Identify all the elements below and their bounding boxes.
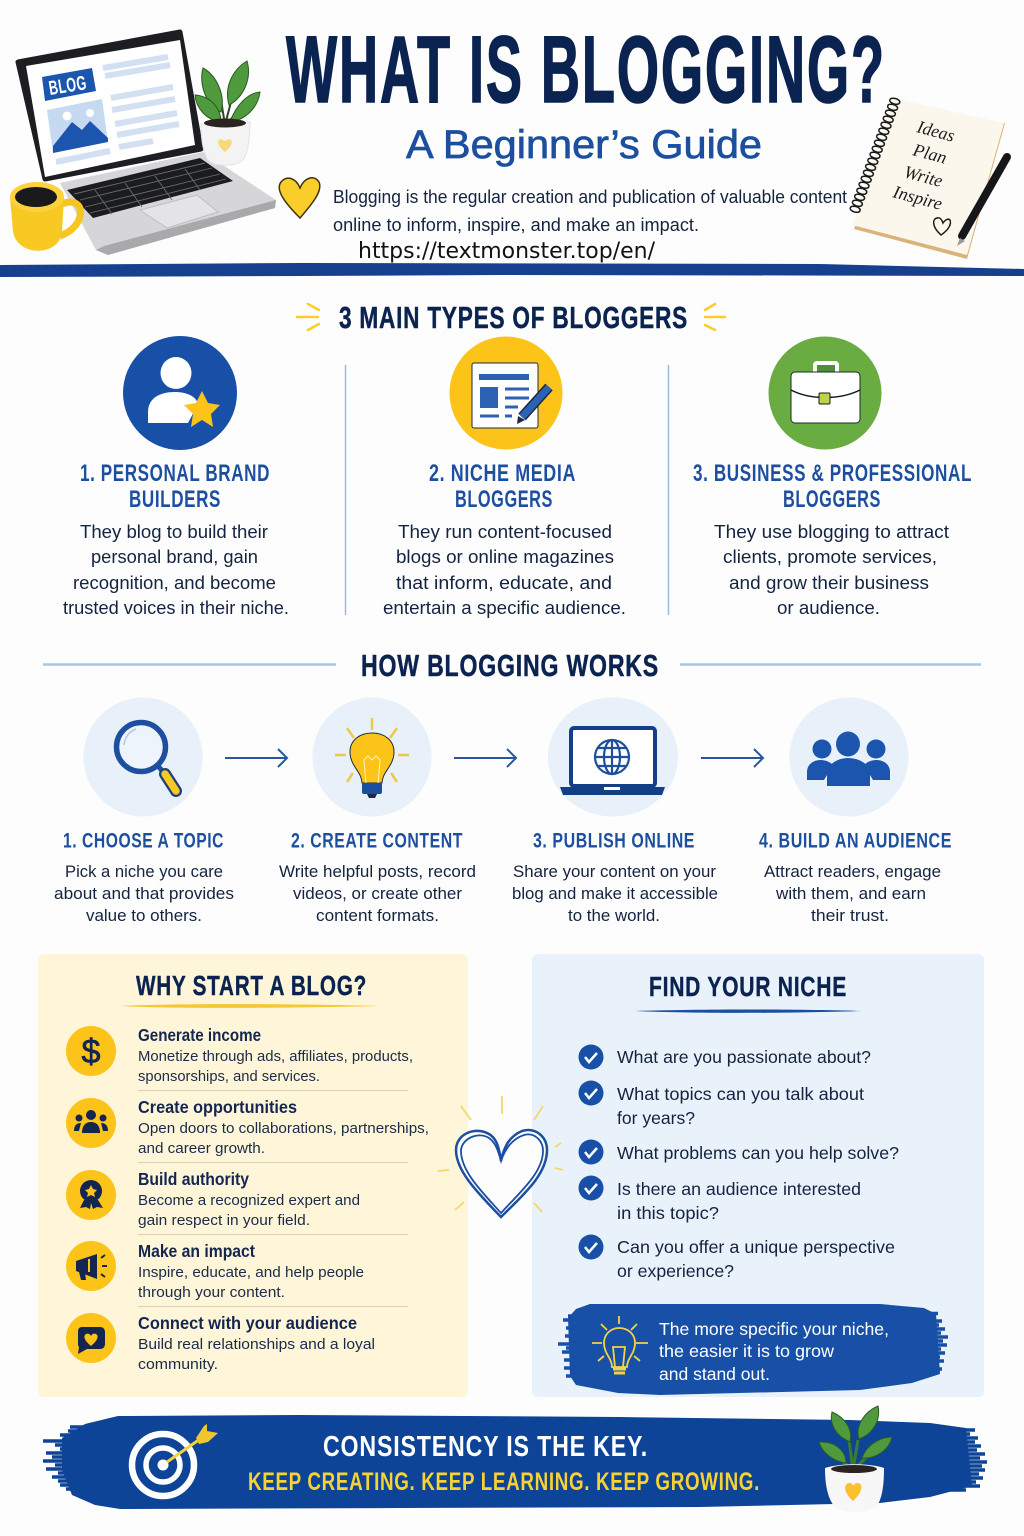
subtitle: A Beginner’s Guide [406,123,762,167]
header brush divider [0,263,1024,277]
item: make an impact: Make an impact [138,1241,255,1261]
step 4 [759,830,952,925]
icon: notebook and pen: Inspire [890,181,944,214]
step 2: 2. CREATE CONTENT [291,830,463,852]
step 2: videos, or create other [293,885,463,903]
column: business and professional bloggers: They use blogging to attract [714,522,949,542]
step 3: blog and make it accessible [512,885,718,903]
step 1: 1. CHOOSE A TOPIC [63,830,224,852]
icon: notebook and pen [850,98,1007,259]
step 1: about and that provides [54,885,234,903]
checklist: What problems can you help solve? [617,1143,899,1163]
step 4: their trust. [811,907,889,925]
item: create opportunities: Create opportunities [138,1097,297,1117]
banner: consistency is the key: CONSISTENCY IS THE KEY. [323,1431,648,1463]
item: connect with your audience: Connect with your audience [138,1313,357,1333]
callout: niche tip: the easier it is to grow [659,1341,834,1361]
arrow [454,749,516,767]
step 4: Attract readers, engage [764,863,941,881]
column: business and professional bloggers: clients, promote services, [723,547,937,567]
icon: tip bulb [592,1316,648,1373]
banner: consistency is the key [43,1406,987,1512]
icon: niche media [450,336,562,450]
item: connect with your audience: community. [138,1357,218,1373]
item: make an impact [66,1241,364,1301]
column: business and professional bloggers: or audience. [777,598,880,618]
icon: notebook and pen: Plan [910,139,949,168]
checklist: in this topic? [617,1203,719,1223]
item: build authority [66,1169,360,1229]
step 3: Share your content on your [513,863,717,881]
item: create opportunities [66,1097,429,1157]
item: create opportunities: Open doors to collaborations, partnerships, [138,1121,429,1137]
icon: laptop with blog page: BLOG [47,72,88,100]
step 2 [279,830,476,925]
intro text [333,187,847,235]
icon: notebook and pen: Write [902,162,945,191]
item: generate income [66,1025,413,1085]
column: business and professional bloggers [693,460,972,618]
column: niche media bloggers: 2. NICHE MEDIA [429,460,576,487]
heading: why start a blog: WHY START A BLOG? [136,970,367,1001]
column: niche media bloggers: blogs or online magazines [396,547,614,567]
item: build authority: gain respect in your field. [138,1213,310,1229]
icon: desk plant [195,61,260,165]
column: niche media bloggers: BLOGGERS [455,486,553,513]
icon: yellow heart [279,178,320,218]
intro text: online to inform, inspire, and make an impact. [333,215,699,235]
column: business and professional bloggers: BLOGGERS [783,486,881,513]
step 3 [512,830,718,925]
checklist: What topics can you talk about [617,1084,864,1104]
icon: audience [790,698,908,816]
item: create opportunities: and career growth. [138,1141,265,1157]
icon: notebook and pen: Ideas [914,116,957,146]
heading: find your niche: FIND YOUR NICHE [649,971,847,1002]
checklist: Is there an audience interested [617,1179,861,1199]
step 1 [54,830,234,925]
banner: consistency is the key: KEEP CREATING. KEEP LEARNING. KEEP GROWING. [248,1468,760,1496]
heading: how blogging works: HOW BLOGGING WORKS [361,648,659,683]
arrow [701,749,763,767]
item: generate income: $ [82,1033,101,1071]
step 3: to the world. [568,907,660,925]
column: business and professional bloggers: and grow their business [729,573,929,593]
column: niche media bloggers: entertain a specific audience. [383,598,626,618]
panel: why start a blog [38,954,468,1397]
panel: find your niche [532,954,984,1397]
callout: niche tip [558,1304,948,1395]
icon: laptop with globe [548,698,678,816]
column: personal brand builders: They blog to build their [80,522,268,542]
step 3: 3. PUBLISH ONLINE [533,830,695,852]
icon: light bulb [312,698,432,816]
callout: niche tip: and stand out. [659,1364,770,1384]
item: build authority: Build authority [138,1169,249,1189]
column: niche media bloggers: that inform, educate, and [396,573,612,593]
column: personal brand builders [63,460,289,618]
column: personal brand builders: recognition, and become [73,573,276,593]
step 4: 4. BUILD AN AUDIENCE [759,830,952,852]
arrow [225,749,287,767]
item: connect with your audience [66,1313,375,1373]
column: personal brand builders: trusted voices in their niche. [63,598,289,618]
icon: personal brand [123,336,237,450]
intro text: Blogging is the regular creation and publication of valuable content [333,187,847,207]
item: make an impact: through your content. [138,1285,285,1301]
icon: coffee mug [10,182,80,251]
icon: magnifying glass [84,698,202,816]
item: build authority: Become a recognized expert and [138,1193,360,1209]
column: niche media bloggers [383,460,626,618]
checklist: Can you offer a unique perspective [617,1237,895,1257]
checklist [578,1044,899,1281]
icon: hand-drawn blue heart [438,1096,563,1217]
item: generate income: Generate income [138,1025,261,1045]
icon: target with arrow [132,1424,218,1496]
column: personal brand builders: 1. PERSONAL BRAND [80,460,270,487]
checklist: or experience? [617,1261,734,1281]
icon: potted plant [819,1406,892,1512]
checklist: for years? [617,1108,695,1128]
heading: 3 main types: 3 MAIN TYPES OF BLOGGERS [339,300,688,335]
column: personal brand builders: BUILDERS [129,486,221,513]
icon: business briefcase [768,336,882,450]
item: generate income: sponsorships, and services. [138,1069,320,1085]
divider lines [346,365,668,615]
item: generate income: Monetize through ads, affiliates, products, [138,1049,413,1065]
step 4: with them, and earn [775,885,926,903]
callout: niche tip: The more specific your niche, [659,1319,889,1339]
item: make an impact: Inspire, educate, and help people [138,1265,364,1281]
checklist: What are you passionate about? [617,1047,871,1067]
step 2: content formats. [316,907,439,925]
step 1: Pick a niche you care [65,863,223,881]
column: personal brand builders: personal brand, gain [91,547,258,567]
icon: laptop with blog page [18,32,276,255]
column: niche media bloggers: They run content-focused [398,522,612,542]
step 1: value to others. [86,907,202,925]
step 2: Write helpful posts, record [279,863,476,881]
url: https://textmonster.top/en/ [358,239,656,264]
item: connect with your audience: Build real relationships and a loyal [138,1337,375,1353]
